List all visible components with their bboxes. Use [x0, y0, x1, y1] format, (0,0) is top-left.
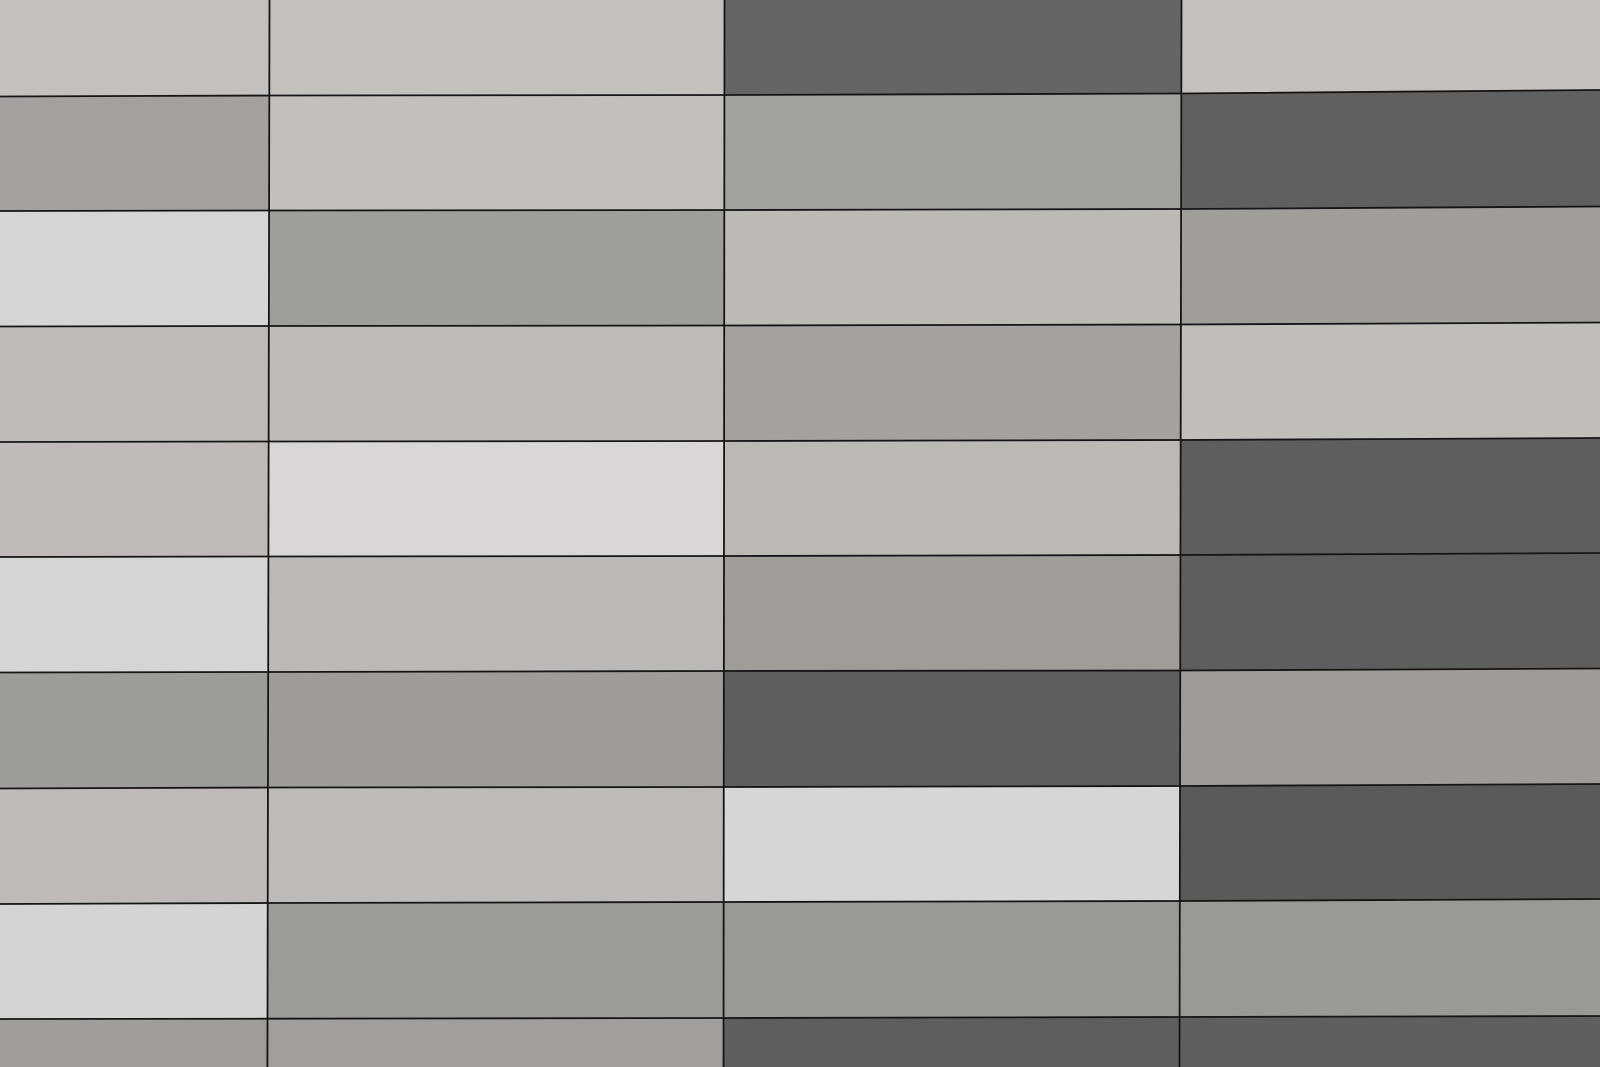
row 7 [0, 668, 1600, 788]
row 3 [0, 206, 1600, 326]
row 10 [0, 1016, 1600, 1067]
row 6 [0, 553, 1600, 672]
row 9 [0, 899, 1600, 1019]
row 8 [0, 784, 1600, 904]
row 2 [0, 90, 1600, 211]
row 1 [0, 0, 1600, 96]
row 4 [0, 322, 1600, 442]
row 5 [0, 438, 1600, 557]
